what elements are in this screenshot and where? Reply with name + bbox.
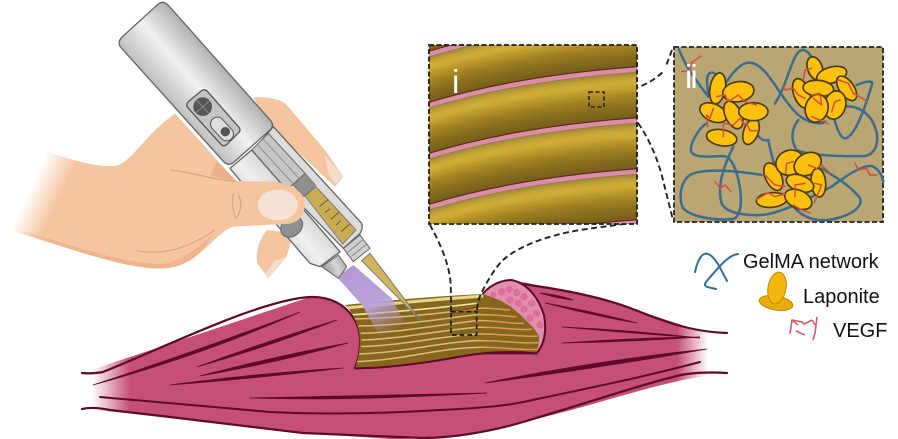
dashed selection box on tissue [451, 312, 477, 335]
plunger head [293, 173, 316, 197]
lower silver barrel [230, 150, 340, 267]
muscle fibres and outlines [93, 293, 707, 399]
transparent casing [253, 127, 362, 248]
UV light beam [337, 265, 405, 337]
label ii: ii [685, 58, 696, 95]
syringe barrel with gel [305, 187, 356, 244]
upper handle body [119, 2, 273, 164]
GelMA polymer chains [679, 49, 883, 220]
Laponite cluster 3 [756, 146, 827, 214]
control panel [187, 90, 240, 146]
legend: Laponite [758, 271, 880, 313]
Laponite cluster 2 [789, 55, 861, 125]
palm and wrist [10, 113, 287, 268]
back finger bottom [257, 230, 293, 278]
dashed zoom lines [430, 50, 673, 312]
thumb nail [258, 190, 298, 220]
needle [362, 253, 421, 321]
hydrogel bottom outline [355, 352, 537, 368]
legend: VEGF [790, 317, 887, 342]
luer connector [343, 235, 370, 262]
layered hydrogel fibres [345, 294, 540, 368]
muscle [75, 280, 737, 439]
panel ii: GelMA network zoom [674, 47, 883, 222]
label i: i [452, 63, 459, 100]
shade near pen [210, 162, 237, 182]
muscle end fades [75, 320, 737, 420]
legend: VEGF: VEGF [833, 320, 887, 342]
thumb [213, 181, 305, 230]
back finger top [253, 97, 343, 187]
power button [193, 97, 212, 116]
light pen device [119, 2, 421, 321]
legend [695, 251, 887, 342]
legend: GelMA network: GelMA network [743, 251, 880, 273]
slider switch [217, 124, 230, 136]
panel i: hydrogel fibres zoom [428, 44, 638, 225]
small dashed box [589, 92, 604, 107]
beam nozzle [322, 255, 347, 278]
Laponite cluster 1 [697, 72, 768, 148]
VEGF strands [682, 56, 877, 213]
knuckle creases [233, 193, 241, 218]
wrist underside shade [20, 230, 213, 269]
muscle body fill [82, 280, 727, 439]
legend: GelMA network [695, 251, 880, 289]
hydrogel tissue patch [337, 265, 547, 373]
muscle cross-section [477, 280, 545, 353]
ribbed plunger section [252, 133, 305, 190]
legend: Laponite: Laponite [803, 286, 880, 308]
palm creases [137, 170, 237, 252]
hand base [10, 97, 343, 278]
